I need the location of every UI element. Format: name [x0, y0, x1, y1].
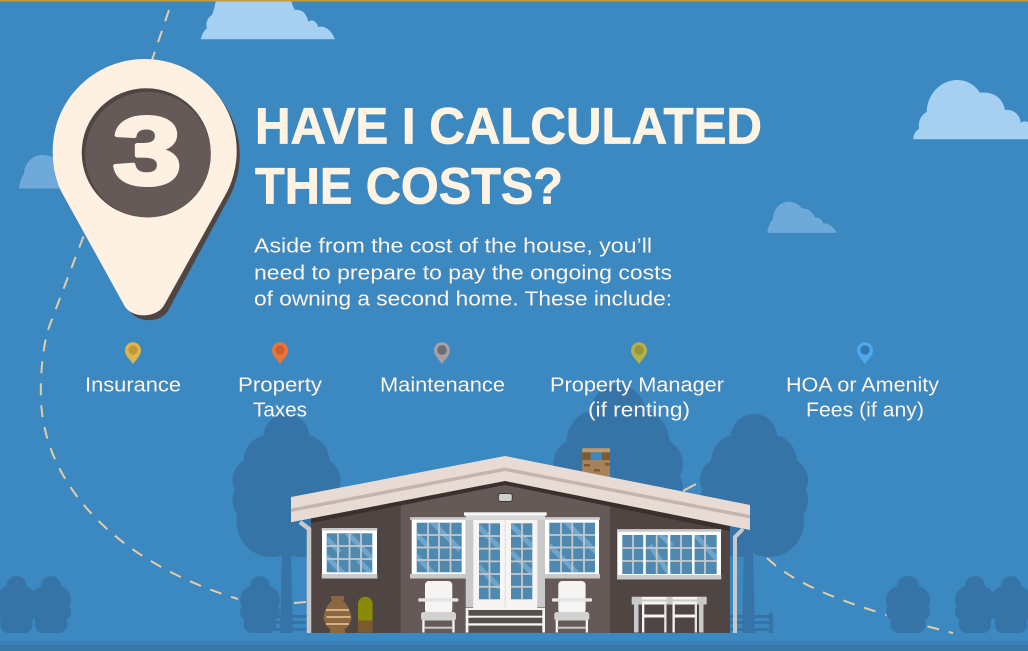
vase [324, 596, 352, 633]
list item: hoa or amenity fees: Fees (if any) [806, 400, 924, 422]
list item: insurance [85, 342, 181, 397]
porch light [498, 494, 512, 502]
map pin with number 3 [53, 59, 240, 320]
list item: property taxes: Taxes [253, 400, 307, 422]
centre wall [401, 480, 610, 633]
house [291, 448, 750, 633]
list item: property manager: Property Manager [550, 375, 724, 397]
walls [311, 480, 730, 633]
number disc [82, 88, 211, 218]
intro paragraph [254, 235, 672, 310]
window: centre right [545, 517, 600, 578]
fence: left [268, 613, 308, 633]
pin shadow [56, 63, 240, 320]
list item: hoa or amenity fees: HOA or Amenity [786, 375, 939, 397]
french doors [464, 512, 547, 608]
list item: property manager: (if renting) [588, 400, 690, 422]
pin body [53, 59, 237, 315]
tree: left [232, 414, 340, 633]
list item: maintenance [380, 342, 505, 397]
list item: property taxes [238, 342, 322, 422]
right gutter [735, 529, 743, 633]
tree: middle [553, 385, 683, 557]
heading: HAVE I CALCULATED [255, 98, 762, 154]
fence: right [730, 613, 773, 633]
list item: property manager [550, 342, 724, 422]
porch steps [466, 608, 545, 632]
number: 3 [113, 98, 181, 205]
cloud: right [913, 80, 1028, 139]
bushes [0, 576, 1028, 633]
intro paragraph: need to prepare to pay the ongoing costs [254, 261, 672, 284]
cloud: middle [767, 202, 837, 233]
tree: right [700, 414, 808, 633]
chair: right [552, 581, 592, 632]
list item: hoa or amenity fees [786, 342, 939, 422]
potted cactus [358, 597, 373, 633]
cloud: top [201, 0, 335, 39]
intro paragraph: Aside from the cost of the house, you’ll [254, 235, 652, 258]
eave shadow [311, 480, 730, 531]
list item: maintenance: Maintenance [380, 375, 505, 397]
list item: property taxes: Property [238, 375, 322, 397]
window: centre left [410, 517, 466, 578]
roof [291, 456, 750, 530]
window: far left [322, 528, 377, 578]
ground [0, 641, 1028, 651]
window: far right [617, 529, 721, 580]
chimney [582, 448, 610, 478]
patio table and chairs [632, 597, 707, 632]
heading: THE COSTS? [255, 158, 563, 214]
intro paragraph: of owning a second home. These include: [254, 287, 672, 310]
top gold edge [0, 0, 1028, 2]
background trees [232, 385, 808, 633]
cloud: left small [19, 155, 66, 188]
chair: left [418, 581, 458, 632]
left gutter [300, 522, 309, 633]
heading [255, 98, 762, 214]
list item: insurance: Insurance [85, 375, 181, 397]
